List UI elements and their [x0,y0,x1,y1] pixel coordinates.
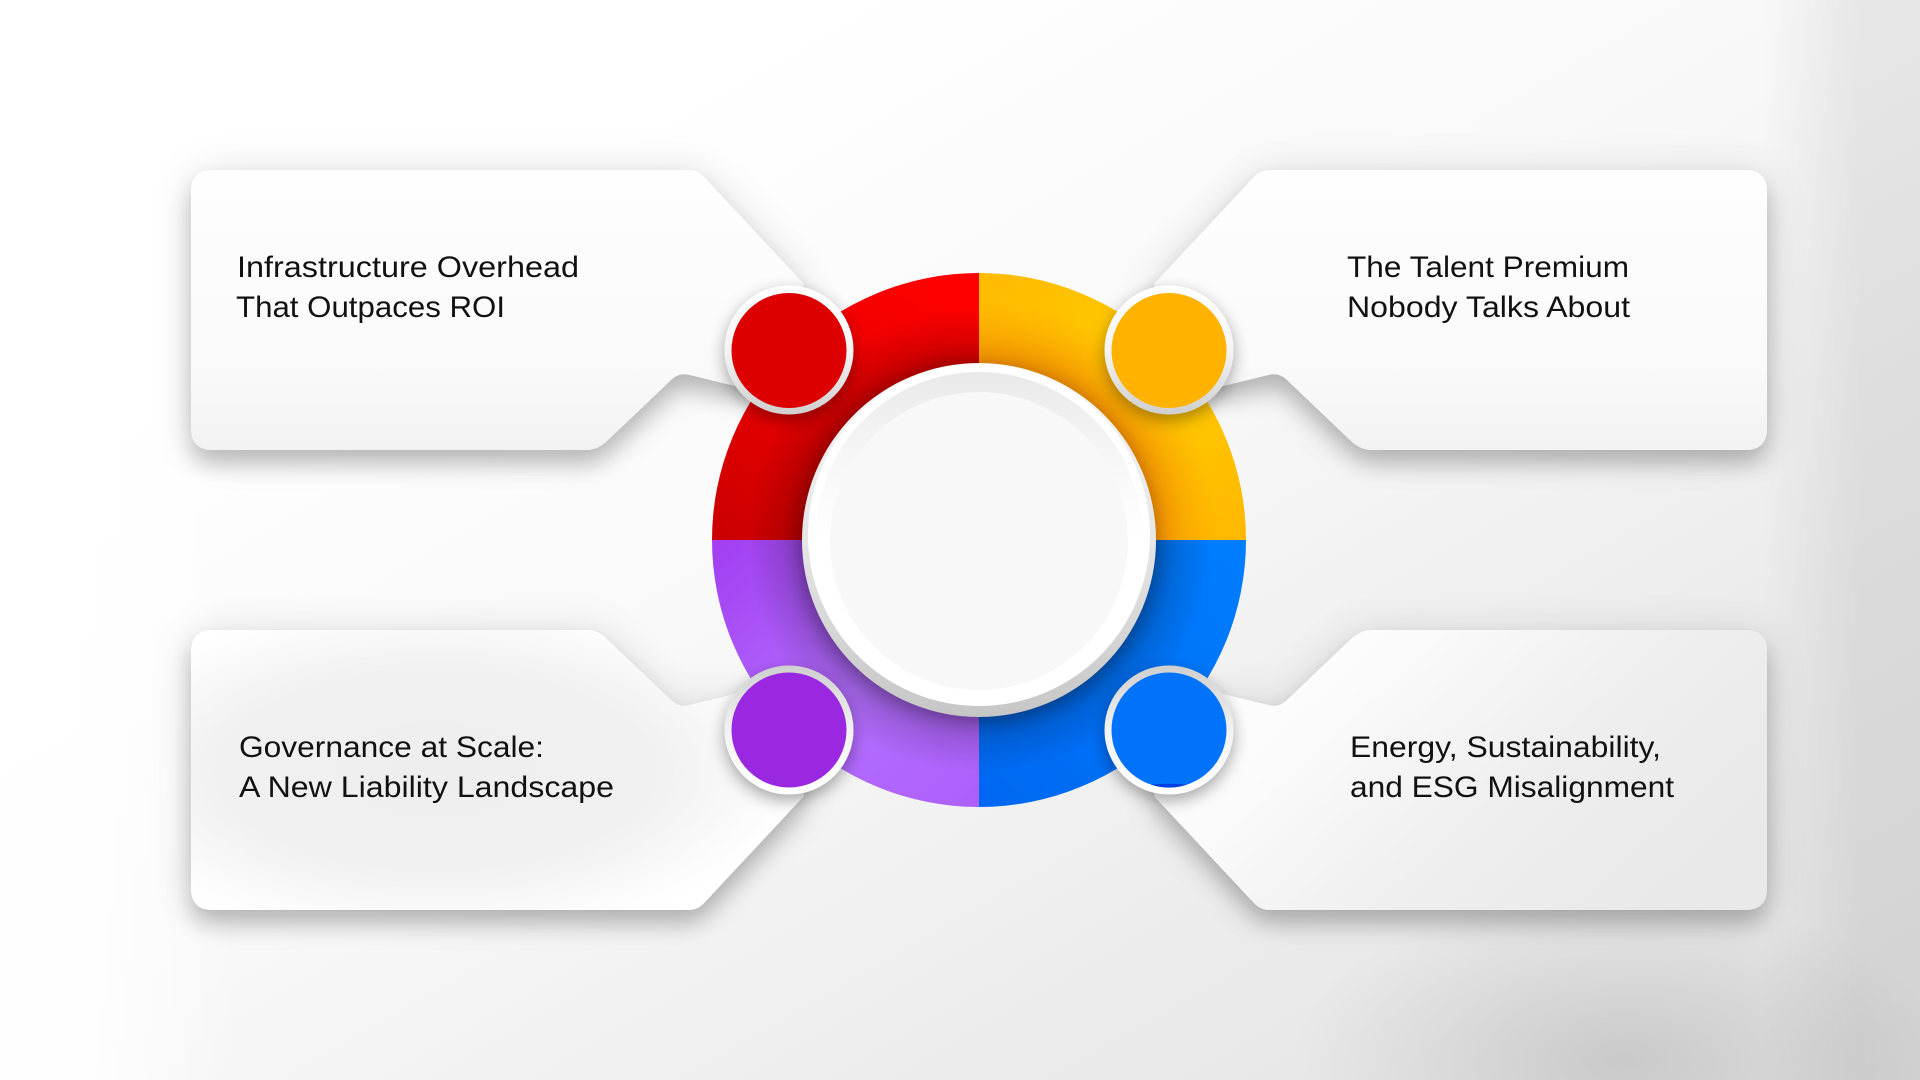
ring segment: red [712,273,979,540]
ring segment: blue [979,540,1246,807]
node: amber [1104,286,1234,414]
center plate [802,363,1156,717]
heading: Infrastructure Overhead [237,251,579,284]
card shape [1154,630,1767,910]
heading: The Talent Premium [1347,251,1629,284]
heading: and ESG Misalignment [1350,771,1675,804]
heading: That Outpaces ROI [236,291,505,324]
heading: A New Liability Landscape [239,771,614,804]
panel: governance at scale [191,630,804,910]
heading: Nobody Talks About [1347,291,1631,324]
ring segment: purple [712,540,979,807]
heading: Governance at Scale: [239,731,544,764]
heading [239,731,614,804]
heading [1347,251,1631,324]
ring chart [712,273,1246,807]
heading [1350,731,1675,804]
heading: Energy, Sustainability, [1350,731,1661,764]
heading [236,251,579,324]
panel: infrastructure overhead [191,170,804,450]
panel: talent premium [1154,170,1767,450]
card shape [191,630,804,910]
card shape [191,170,804,450]
node: red [724,286,854,414]
node: purple [724,666,854,794]
ring segment: amber [979,273,1246,540]
panel: energy and esg [1154,630,1767,910]
card shape [1154,170,1767,450]
node: blue [1104,666,1234,794]
